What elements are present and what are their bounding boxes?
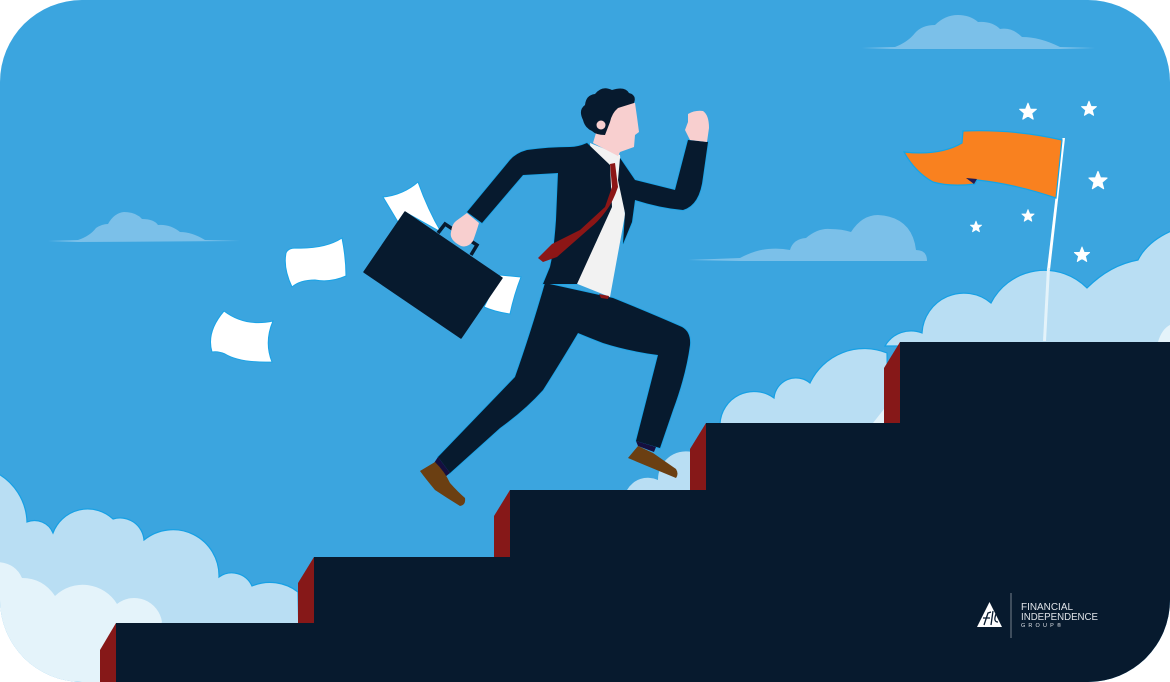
logo: Financial Independence Group xyxy=(977,593,1098,638)
stairs: navy steps xyxy=(116,342,1170,682)
flying paper: middle xyxy=(285,238,346,287)
cloud: behind third step xyxy=(627,451,692,490)
stars around the flag xyxy=(970,101,1107,261)
logo: wordmark xyxy=(1021,602,1098,629)
flying paper: lower xyxy=(210,311,273,362)
paper: sticking out of briefcase top xyxy=(383,182,441,232)
flag pole xyxy=(1043,138,1065,341)
cloud bank: lower left, rear xyxy=(0,472,300,682)
man: red tie xyxy=(538,163,618,262)
man: trousers xyxy=(438,283,690,473)
cloud bank: right, behind flag pole xyxy=(885,229,1170,346)
man: left shoe xyxy=(420,462,465,506)
logo: wordmark: INDEPENDENCE xyxy=(1021,612,1098,623)
logo: wordmark: FINANCIAL xyxy=(1021,602,1073,613)
man: hair xyxy=(581,88,635,135)
man: shirt xyxy=(575,143,625,297)
businessman xyxy=(420,88,709,506)
stairs: red risers xyxy=(100,342,900,682)
cloud sliver: light patch by fourth riser xyxy=(873,409,884,423)
cloud: behind fourth step xyxy=(720,349,888,424)
man: raised hand xyxy=(685,111,709,142)
man: right shoe xyxy=(628,446,678,478)
man: jacket back panel and arm xyxy=(467,143,612,284)
man: jacket front panel and arm xyxy=(618,140,708,244)
man: hand holding briefcase xyxy=(451,213,479,246)
man: ear xyxy=(596,120,606,130)
man: belt buckle xyxy=(599,294,609,299)
cloud: left sky xyxy=(48,212,240,242)
orange flag xyxy=(904,131,1062,198)
light cloud: right corner xyxy=(1158,324,1170,342)
briefcase xyxy=(364,212,502,338)
man: neck and face xyxy=(593,102,639,156)
logo: triangle mark xyxy=(977,602,1002,627)
staircase xyxy=(100,342,1170,682)
man: blue halo around suit xyxy=(438,140,708,473)
logo: divider xyxy=(1010,593,1012,638)
cloud bank: lower left, front xyxy=(0,562,162,682)
paper: under briefcase xyxy=(484,275,521,314)
cloud: middle sky xyxy=(688,215,927,261)
man: socks xyxy=(434,441,656,477)
cloud: top right sky xyxy=(862,15,1095,49)
logo: wordmark: GROUP® xyxy=(1021,622,1061,629)
